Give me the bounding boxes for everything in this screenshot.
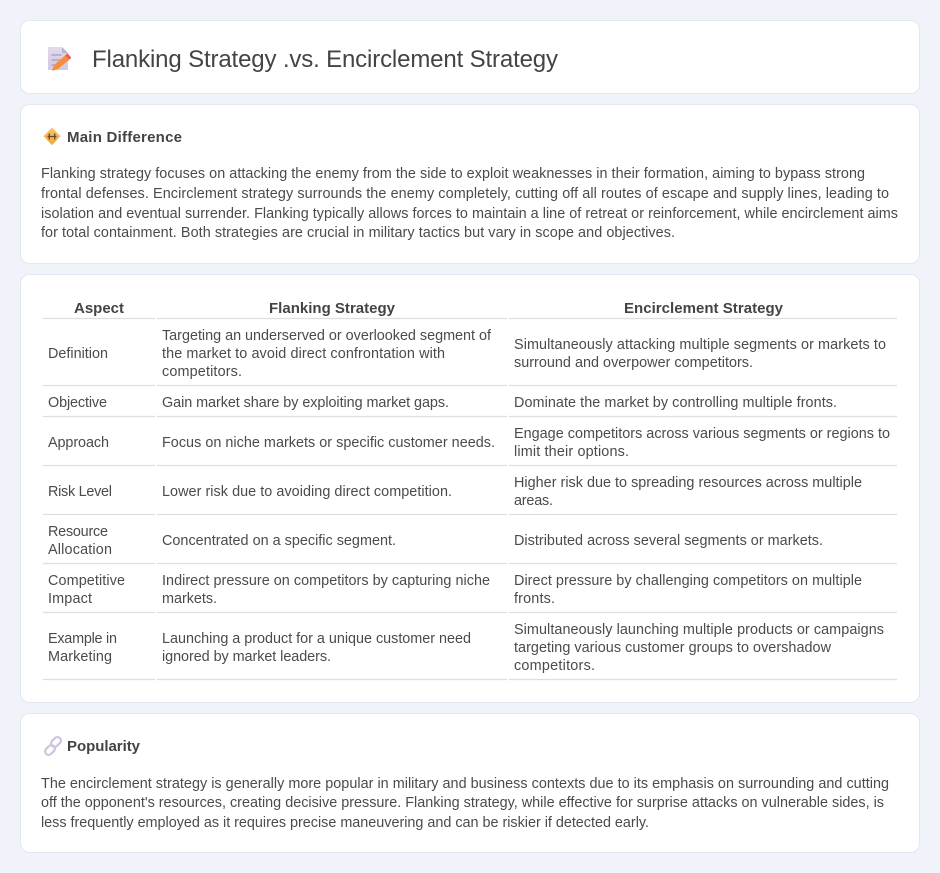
row: resource allocation: Distributed across several segments or markets. <box>514 533 823 549</box>
row: example in marketing: ignored by market leaders. <box>162 649 331 665</box>
text block: main difference: Flanking strategy focuses on attacking the enemy from the side to exploit weaknesses in their formation, aiming to bypass strong <box>41 166 865 182</box>
text block: popularity <box>41 776 889 831</box>
text block: popularity: off the opponent's resources, creating decisive pressure. Flanking strategy, while effective for surprise attacks on vulnerable sides, is <box>41 795 884 811</box>
row: approach: Engage competitors across various segments or regions to <box>514 426 890 442</box>
row: competitive impact: Indirect pressure on competitors by capturing niche <box>162 573 490 589</box>
table header: Aspect <box>74 300 124 317</box>
row: risk level: Lower risk due to avoiding direct competition. <box>162 484 452 500</box>
row: objective: Objective <box>48 395 107 411</box>
row: definition: Definition <box>48 346 108 362</box>
text block: popularity: The encirclement strategy is generally more popular in military and business contexts due to its emphasis on surrounding and cutting <box>41 776 889 792</box>
title: Flanking Strategy .vs. Encirclement Strategy <box>92 46 558 73</box>
text block: popularity: less frequently employed as it requires precise maneuvering and can be riskier if detected early. <box>41 815 649 831</box>
row: competitive impact: Competitive <box>48 573 125 589</box>
row: competitive impact: fronts. <box>514 591 555 607</box>
row: example in marketing: Example in <box>48 631 117 647</box>
panel: popularity <box>20 714 920 852</box>
row: example in marketing: competitors. <box>514 658 595 674</box>
row: competitive impact: Impact <box>48 591 92 607</box>
row: example in marketing: Launching a product for a unique customer need <box>162 631 471 647</box>
row: definition: competitors. <box>162 364 242 380</box>
text block: main difference <box>41 166 898 241</box>
icon: document with pencil <box>48 47 71 71</box>
text block: main difference: isolation and eventual surrender. Flanking typically allows forces to maintain a line of retreat or reinforcement, while encirclement aims <box>41 206 898 222</box>
row: risk level <box>43 475 897 514</box>
icon: warning diamond <box>44 128 60 145</box>
text block: main difference: frontal defenses. Encirclement strategy surrounds the enemy completely, cutting off all routes of escape and supply lines, leading to <box>41 186 889 202</box>
row: example in marketing: targeting various customer groups to overshadow <box>514 640 832 656</box>
row: definition: surround and overpower competitors. <box>514 355 753 371</box>
row: resource allocation: Resource <box>48 524 108 540</box>
row: definition: Targeting an underserved or overlooked segment of <box>162 328 492 344</box>
row: approach <box>43 426 897 466</box>
row: objective: Dominate the market by controlling multiple fronts. <box>514 395 837 411</box>
heading: main difference: Main Difference <box>67 129 182 146</box>
row: risk level: areas. <box>514 493 553 509</box>
row: risk level: Risk Level <box>48 484 112 500</box>
row: risk level: Higher risk due to spreading resources across multiple <box>514 475 862 491</box>
row: definition <box>43 328 897 386</box>
row: definition: the market to avoid direct confrontation with <box>162 346 445 362</box>
heading: popularity: Popularity <box>67 738 141 755</box>
text block: main difference: for total containment. Both strategies are crucial in military tactics but vary in scope and objectives. <box>41 225 675 241</box>
row: competitive impact: markets. <box>162 591 217 607</box>
row: resource allocation: Concentrated on a specific segment. <box>162 533 396 549</box>
panel: title header <box>20 20 920 94</box>
row: objective: Gain market share by exploiting market gaps. <box>162 395 449 411</box>
panel: main difference <box>20 104 920 264</box>
table header: Encirclement Strategy <box>624 300 784 317</box>
icon: chain link <box>44 736 62 756</box>
row: resource allocation <box>43 524 897 564</box>
row: approach: Approach <box>48 435 109 451</box>
row: competitive impact: Direct pressure by challenging competitors on multiple <box>514 573 862 589</box>
row: example in marketing: Marketing <box>48 649 112 665</box>
row: example in marketing <box>43 622 897 680</box>
table header <box>43 300 897 318</box>
row: approach: Focus on niche markets or specific customer needs. <box>162 435 495 451</box>
row: resource allocation: Allocation <box>48 542 112 558</box>
row: objective <box>43 395 897 416</box>
panel: comparison table <box>20 274 920 702</box>
table header: Flanking Strategy <box>269 300 396 317</box>
row: approach: limit their options. <box>514 444 629 460</box>
row: definition: Simultaneously attacking multiple segments or markets to <box>514 337 886 353</box>
row: example in marketing: Simultaneously launching multiple products or campaigns <box>514 622 884 638</box>
row: competitive impact <box>43 573 897 612</box>
